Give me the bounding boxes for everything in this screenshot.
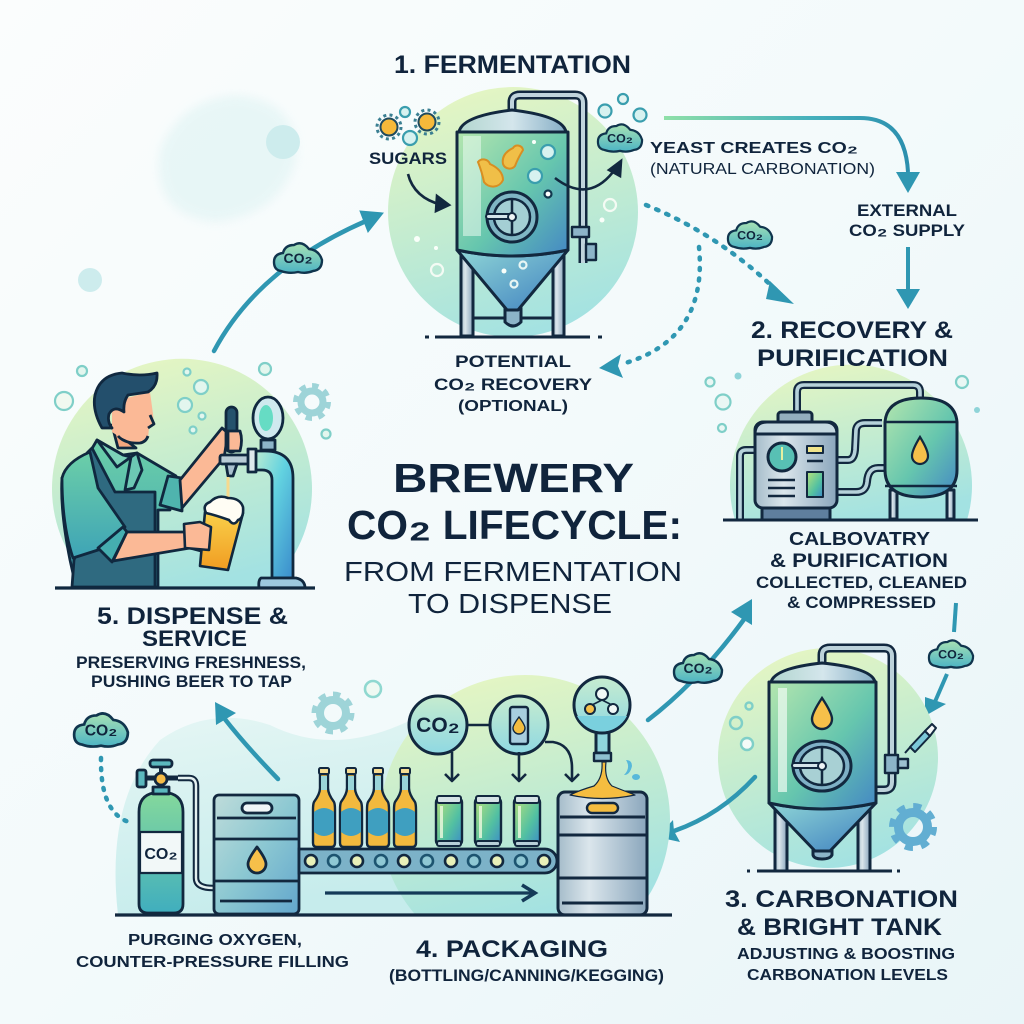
caption: carbonation [737,946,955,984]
label: yeast creates co2: YEAST CREATES CO ₂ [650,135,858,158]
panel: fermentation [369,51,875,415]
icon: co2 cloud on recovery arrow [674,653,722,683]
title block: CO₂ LIFECYCLE: [347,492,682,551]
beer tap [220,397,305,588]
icon: co2 cloud on dotted path [728,221,772,249]
arrow: co2 out of tank [555,161,621,189]
panel: dispense and service [52,359,330,691]
backdrop disc [52,359,312,588]
bubbles [730,702,753,750]
heading: 4. packaging: 4. PACKAGING [416,936,608,963]
compressor machine [755,412,837,520]
label: sugars: SUGARS [369,149,447,168]
bottles [313,768,416,847]
icon: co2 cloud near carbonation [929,640,973,668]
caption: carbonation: ADJUSTING & BOOSTING [737,946,955,963]
label: external co2 supply: EXTERNAL [857,202,957,220]
cylinder label: CO₂ [144,841,178,864]
ground line [115,913,672,917]
icon: co2 cloud: CO₂ [607,129,633,147]
keg being filled [557,762,648,915]
sparkles [734,372,980,413]
icon: co2 circle [409,696,467,754]
icon: can circle [490,696,548,754]
caption: recovery: & COMPRESSED [787,593,936,612]
icon: co2 circle: CO₂ [416,707,460,738]
caption: recovery: COLLECTED, CLEANED [756,573,967,592]
cans [436,796,540,846]
sparkles [414,140,604,274]
heading: 3. carbonation: 3. CARBONATION [725,886,958,913]
icon: co2 cloud: CO₂ [85,719,117,741]
panel: carbonation and bright tank [718,648,958,984]
arrow: fermentation to external supply [664,118,920,193]
ground line [747,870,900,872]
arrow: packaging to recovery [648,599,752,720]
title block [344,455,682,619]
icon: gear [892,806,934,848]
caption: purging oxygen: PURGING OXYGEN, [128,932,302,949]
dotted arrow: potential recovery [599,247,700,378]
caption: recovery [756,529,967,612]
heading: 5. dispense and service: 5. DISPENSE & [97,603,288,630]
label: potential recovery: (OPTIONAL) [458,398,568,415]
arrow: dispense to fermentation [214,211,383,351]
heading: 3. carbonation: & BRIGHT TANK [737,914,943,941]
co2 cylinder and hose [137,760,213,913]
arrow: recovery to carbonation [925,603,956,716]
ground line [723,518,978,522]
heading: 2. recovery and purification: 2. RECOVERY & [751,317,953,344]
title block: TO DISPENSE [408,588,612,619]
caption: dispense [76,654,306,691]
sugar icons [377,110,439,139]
panel: recovery and purification [706,317,980,612]
caption: recovery: & PURIFICATION [770,551,948,572]
icon: gear [314,694,352,732]
splash droplets [624,760,640,780]
arrow: sugars into tank [408,174,449,211]
connector between circles [467,724,490,726]
flow arrow [325,885,535,901]
caption: bottling canning kegging: (BOTTLING/CANNING/KEGGING) [389,966,664,985]
storage vessel [885,398,957,519]
bubbles [55,363,330,438]
heading: 2. recovery and purification [751,317,953,372]
label: external co2 supply [849,202,965,241]
decorative blob top left [78,95,300,292]
icon: co2 cloud [598,124,642,152]
dotted line from cloud to cylinder [101,758,132,823]
heading: 5. dispense and service: SERVICE [142,626,247,651]
pale backdrop blob [116,700,470,915]
arrow: carbonation to packaging [657,777,755,842]
fermentation tank [457,95,596,336]
caption: dispense: PUSHING BEER TO TAP [91,673,292,691]
icon: co2 cloud [74,713,128,747]
icon: co2 cloud on dispense arrow: CO₂ [283,247,313,267]
caption: recovery: CALBOVATRY [789,529,930,549]
backdrop disc [718,648,938,868]
label: potential recovery [434,352,593,415]
icon: drop [912,437,928,464]
panel: packaging [74,675,672,985]
caption: dispense: PRESERVING FRESHNESS, [76,654,306,672]
title block: BREWERY [393,455,634,501]
label: yeast creates co2 [650,135,875,178]
heading: 2. recovery and purification: PURIFICATION [757,345,948,372]
icon: injector [905,724,936,753]
title block: FROM FERMENTATION [344,556,682,587]
conveyor belt [299,849,557,873]
keg with drop [214,795,299,914]
backdrop disc [380,675,670,915]
arrows into cans [445,742,579,781]
label: potential recovery: CO₂ RECOVERY [434,370,593,395]
backdrop disc [730,365,972,520]
heading: 1. fermentation: 1. FERMENTATION [394,51,631,79]
arrow: packaging to dispense [215,702,278,779]
bartender figure [62,373,228,587]
bubbles [706,376,968,432]
heading: 5. dispense and service [97,603,288,651]
ground line [55,586,315,590]
bubbles [400,94,646,288]
caption: purging oxygen [76,932,349,971]
bubble [365,681,381,697]
pipes [740,385,920,520]
icon: filling head [574,677,630,761]
icon: co2 cloud on recovery arrow: CO₂ [683,657,713,677]
heading: 3. carbonation [725,886,958,941]
dotted arrow: fermentation to recovery [646,205,794,304]
ground line [425,336,602,338]
label: external co2 supply: CO₂ SUPPLY [849,217,965,241]
caption: purging oxygen: COUNTER-PRESSURE FILLING [76,954,349,971]
label: potential recovery: POTENTIAL [455,352,571,371]
icon: gear [296,386,328,418]
beer glass [184,477,243,570]
icon: co2 cloud on dotted path: CO₂ [737,226,763,244]
label: yeast creates co2: (NATURAL CARBONATION) [650,161,875,178]
caption: carbonation: CARBONATION LEVELS [747,967,948,984]
icon: co2 cloud on dispense arrow [274,243,322,273]
yeast cells [478,146,523,187]
backdrop disc [388,87,638,337]
bright tank [769,648,908,871]
icon: drop [812,698,832,729]
arrow: supply to recovery [896,247,920,309]
icon: co2 cloud near carbonation: CO₂ [938,645,964,663]
